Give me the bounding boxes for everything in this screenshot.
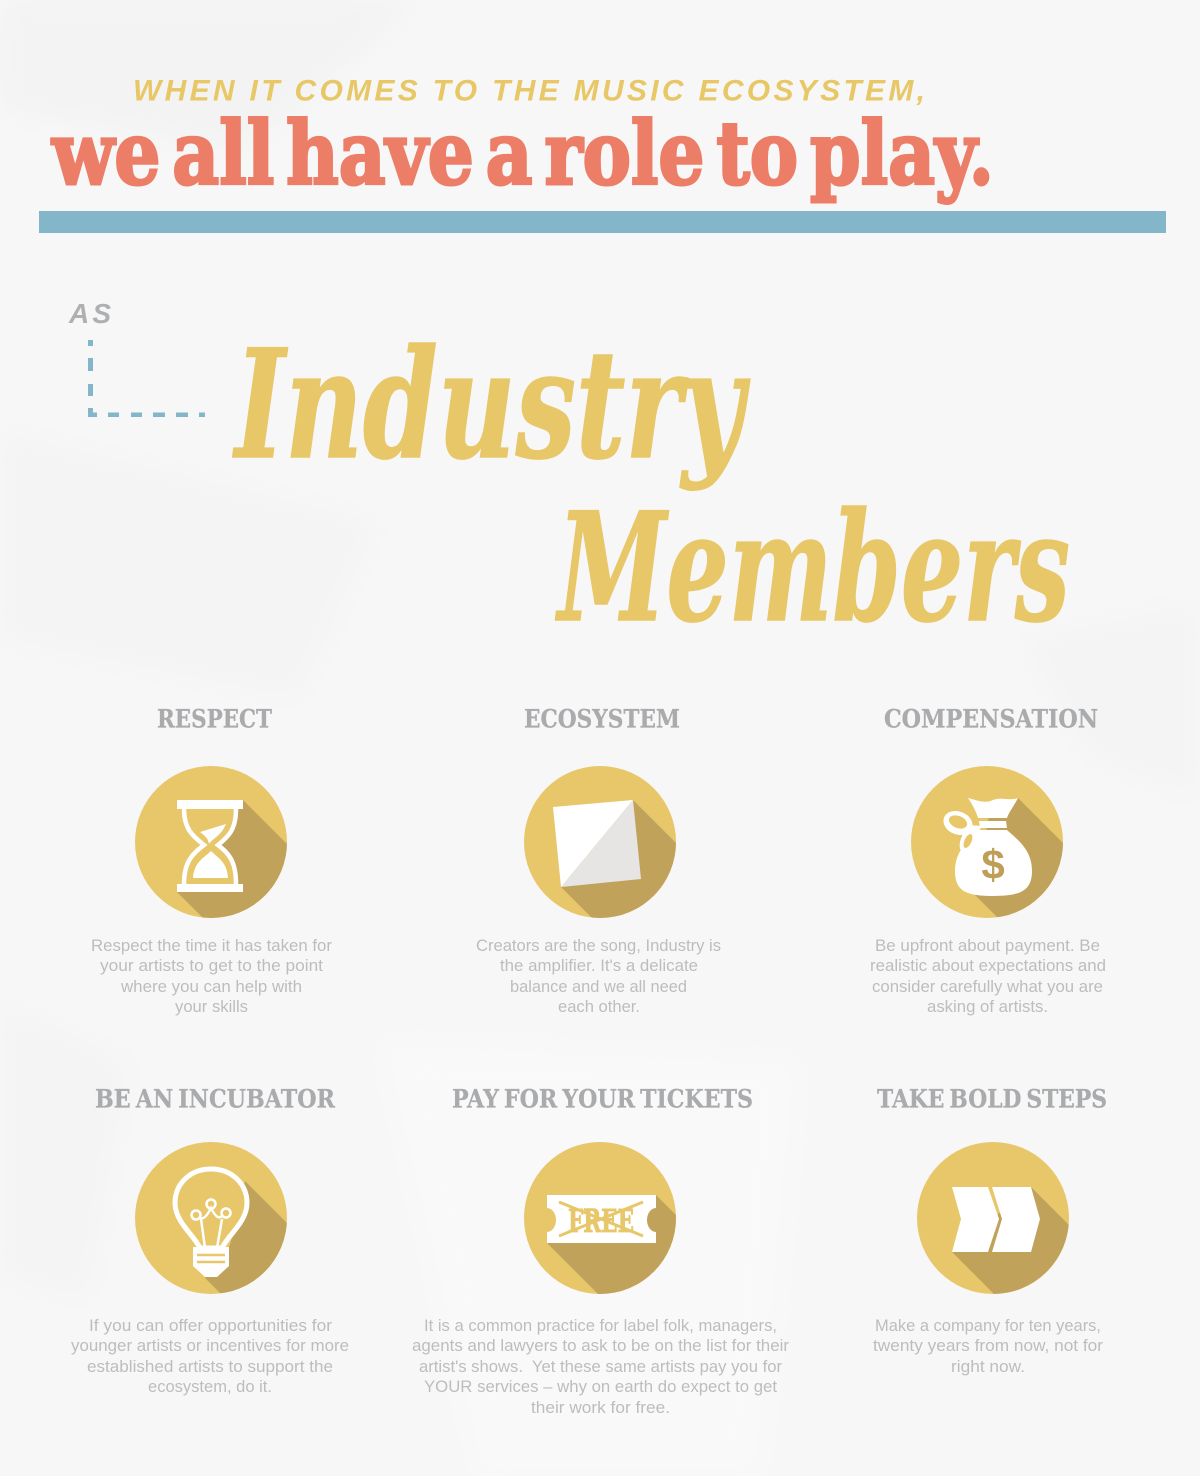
text: ecosystem: each other. <box>558 998 640 1016</box>
text: take bold steps <box>873 1317 1104 1376</box>
text: respect: where you can help with <box>120 978 302 996</box>
heading: pay for your tickets: PAY FOR YOUR TICKETS <box>452 1084 753 1114</box>
kicker line: WHEN IT COMES TO THE MUSIC ECOSYSTEM, <box>133 74 925 108</box>
icon: light bulb <box>135 1142 287 1294</box>
text: be an incubator: ecosystem, do it. <box>148 1378 272 1396</box>
icon: free ticket crossed out: FREE <box>568 1202 634 1240</box>
text: be an incubator <box>71 1317 349 1396</box>
text: pay for your tickets: YOUR services – why on earth do expect to get <box>424 1378 777 1396</box>
icon: money bag <box>911 766 1063 918</box>
text: ecosystem: the amplifier. It's a delicate <box>500 957 698 975</box>
text: pay for your tickets: agents and lawyers to ask to be on the list for their <box>412 1337 790 1355</box>
panel: compensation <box>870 704 1106 1016</box>
panel: take bold steps <box>873 1084 1107 1376</box>
heading: Industry Members <box>232 317 1070 656</box>
text: pay for your tickets: their work for free. <box>531 1399 670 1417</box>
panel: pay for your tickets <box>412 1084 790 1417</box>
panel: ecosystem <box>476 704 721 1016</box>
panel: be an incubator <box>71 1084 349 1396</box>
heading: take bold steps: TAKE BOLD STEPS <box>877 1084 1107 1114</box>
text: be an incubator: If you can offer opportunities for <box>89 1317 333 1335</box>
text: be an incubator: established artists to support the <box>87 1358 333 1376</box>
text: take bold steps: Make a company for ten years, <box>875 1317 1101 1335</box>
text: ecosystem: Creators are the song, Industry is <box>476 937 721 955</box>
heading: be an incubator: BE AN INCUBATOR <box>95 1084 335 1114</box>
text: compensation: realistic about expectations and <box>870 957 1106 975</box>
text: pay for your tickets: artist's shows. Yet these same artists pay you for <box>419 1358 783 1376</box>
blue header bar <box>39 211 1166 233</box>
text: take bold steps: twenty years from now, not for <box>873 1337 1104 1355</box>
heading: Industry Members: Industry <box>232 317 750 493</box>
icon: free ticket crossed out <box>524 1142 676 1294</box>
icon: double chevron <box>917 1142 1069 1294</box>
text: respect <box>91 937 333 1016</box>
text: ecosystem: balance and we all need <box>510 978 687 996</box>
panel: respect <box>91 704 333 1016</box>
text: respect: your artists to get to the point <box>100 957 323 975</box>
text: compensation: Be upfront about payment. Be <box>875 937 1100 955</box>
heading: ecosystem: ECOSYSTEM <box>524 704 680 734</box>
label: AS: AS <box>68 298 111 329</box>
text: take bold steps: right now. <box>951 1358 1025 1376</box>
text: be an incubator: younger artists or incentives for more <box>71 1337 349 1355</box>
header <box>51 74 994 205</box>
bow loops <box>940 807 982 856</box>
text: compensation: consider carefully what you are <box>872 978 1103 996</box>
icon: money bag: $ <box>981 841 1005 888</box>
heading: compensation: COMPENSATION <box>884 704 1098 734</box>
text: ecosystem <box>476 937 721 1016</box>
text: respect: your skills <box>175 998 248 1016</box>
text: pay for your tickets <box>412 1317 790 1417</box>
title: we all have a role to play. <box>51 102 994 205</box>
text: respect: Respect the time it has taken for <box>91 937 333 955</box>
text: pay for your tickets: It is a common practice for label folk, managers, <box>424 1317 777 1335</box>
text: compensation <box>870 937 1106 1016</box>
icon: folded paper <box>524 766 676 918</box>
heading: respect: RESPECT <box>157 704 272 734</box>
text: compensation: asking of artists. <box>927 998 1048 1016</box>
icon: hourglass <box>135 766 287 918</box>
dashed connector arrow <box>88 340 205 417</box>
